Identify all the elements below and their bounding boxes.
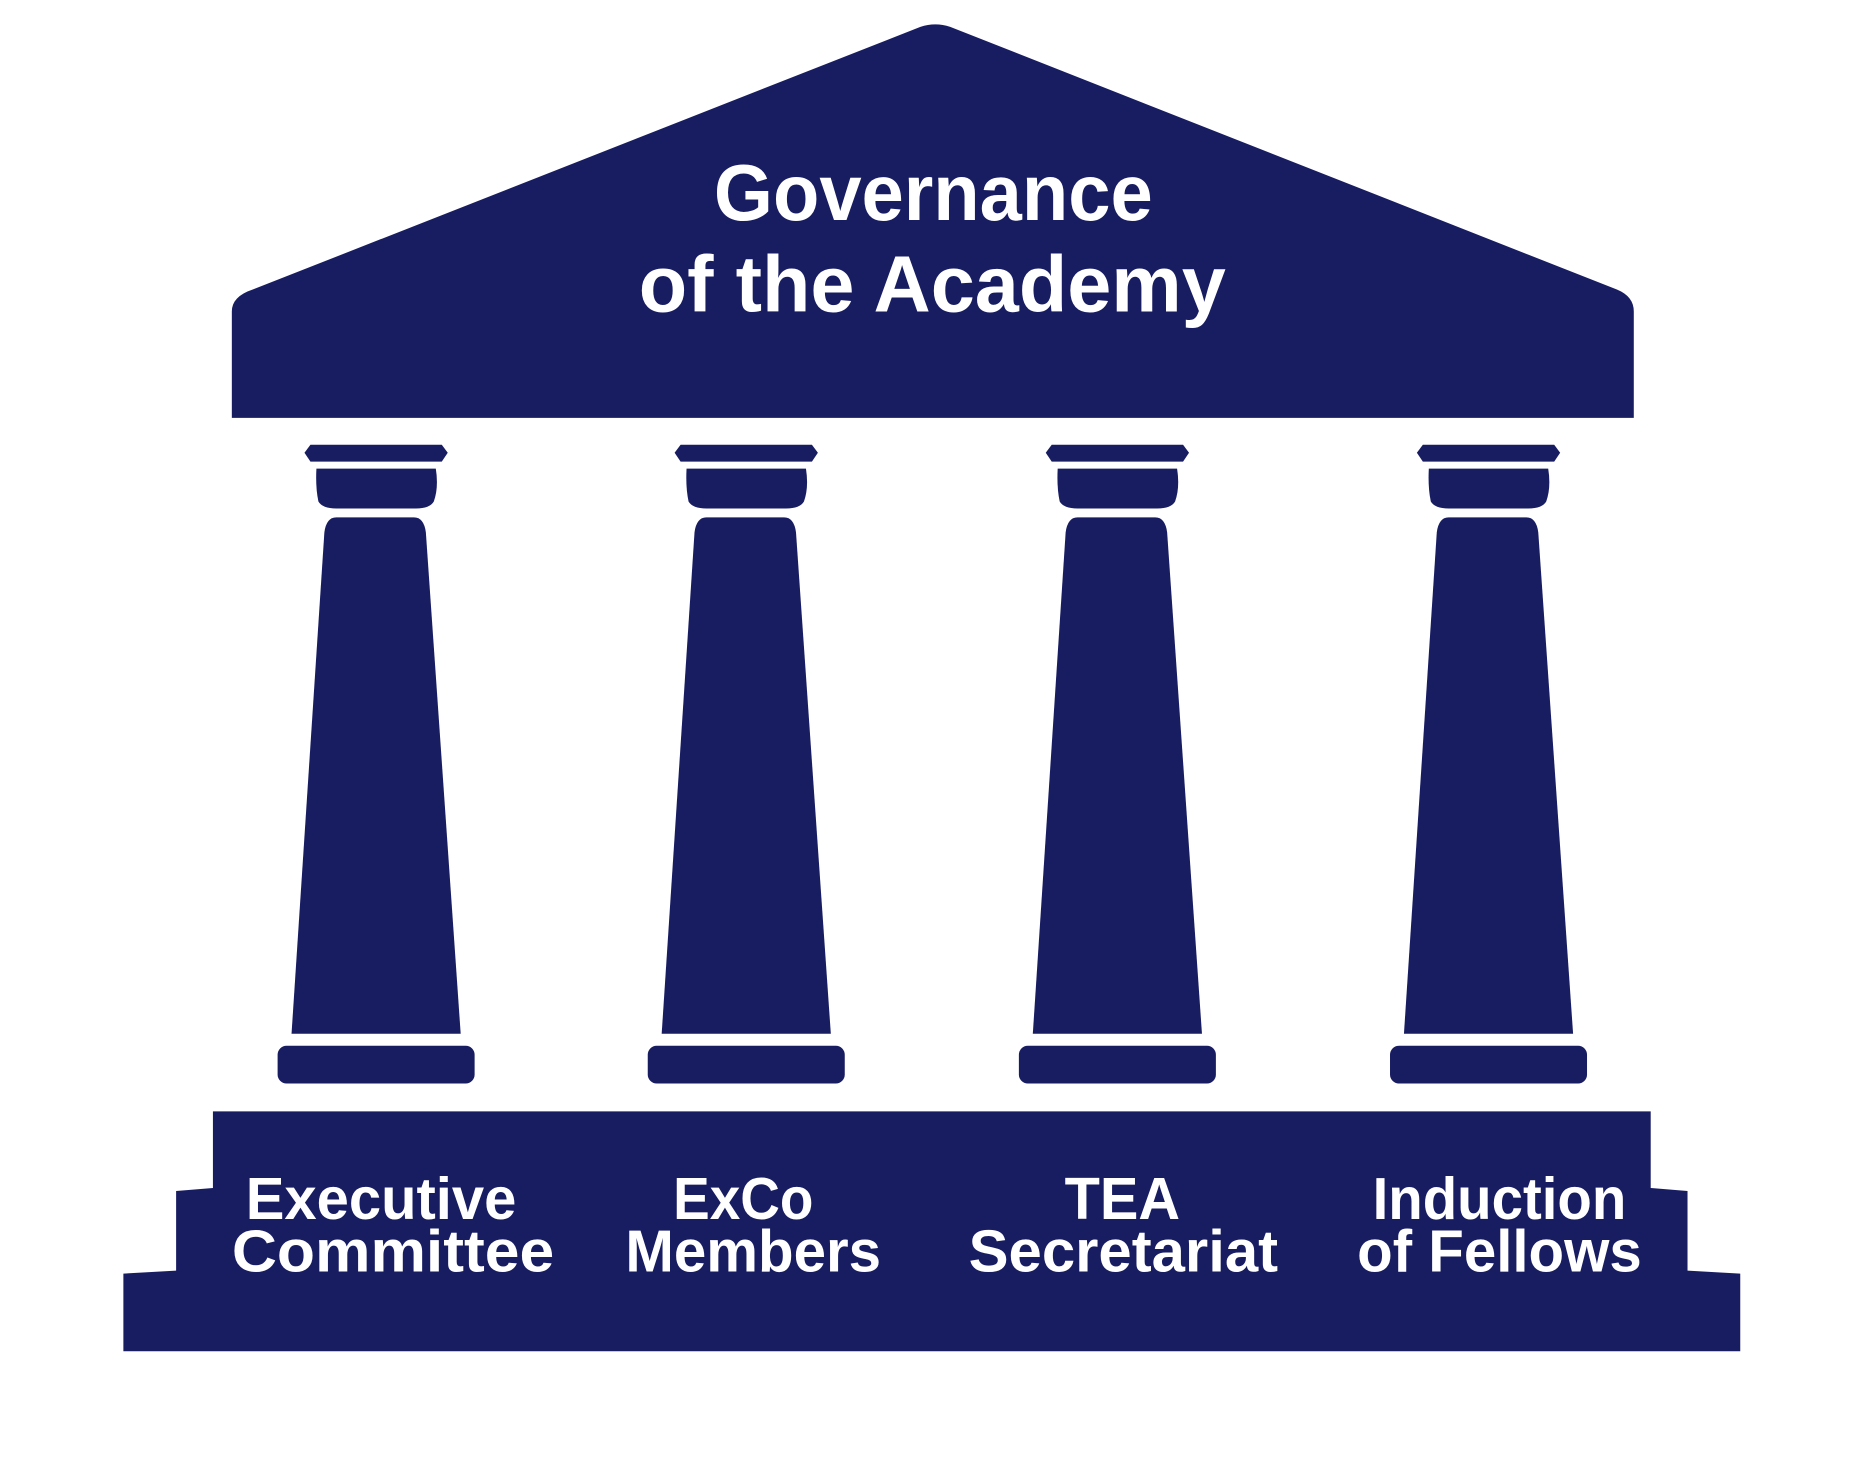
label: TEA Secretariat: Secretariat — [969, 1218, 1278, 1285]
label: ExCo Members: Members — [625, 1218, 881, 1285]
pillar 1 — [278, 445, 475, 1084]
label: Executive Committee: Committee — [232, 1218, 554, 1285]
temple diagram — [123, 24, 1740, 1351]
label: ExCo Members: ExCo — [673, 1165, 813, 1232]
pillar 4 — [1390, 445, 1587, 1084]
label: TEA Secretariat: TEA — [1065, 1165, 1180, 1232]
title: Governance — [714, 148, 1153, 237]
roof pediment — [232, 24, 1634, 418]
title — [639, 148, 1226, 328]
stepped base — [123, 1111, 1740, 1351]
label: ExCo Members — [625, 1165, 881, 1285]
title: of the Academy — [639, 239, 1226, 328]
label: Induction of Fellows — [1357, 1165, 1642, 1285]
label: Executive Committee — [232, 1165, 554, 1285]
label: Induction of Fellows: of Fellows — [1357, 1218, 1642, 1285]
label: Executive Committee: Executive — [246, 1165, 516, 1232]
pillar 3 — [1019, 445, 1216, 1084]
pillar 2 — [648, 445, 845, 1084]
label: Induction of Fellows: Induction — [1373, 1165, 1626, 1232]
label: TEA Secretariat — [969, 1165, 1278, 1285]
